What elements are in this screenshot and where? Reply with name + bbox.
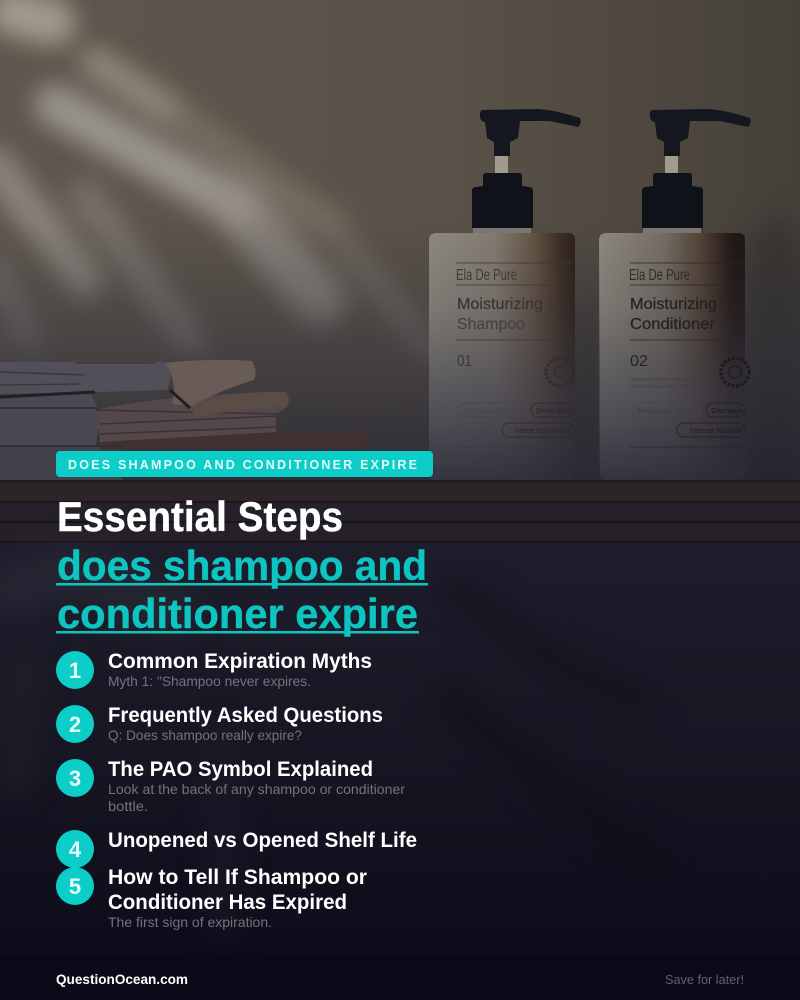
bottle label: Shampoo [457, 316, 525, 333]
step 2 text: Q: Does shampoo really expire? [108, 727, 302, 743]
lower book cover [100, 431, 367, 450]
pump stem [665, 156, 678, 173]
page block [0, 392, 100, 446]
number badge 4: 4 [69, 837, 82, 862]
upper magazine [0, 362, 171, 394]
step 5 text: The first sign of expiration. [108, 914, 272, 930]
title: conditioner expire [57, 590, 418, 637]
lower dark area: fabric and soft shadows [0, 543, 800, 956]
footer brand: QuestionOcean.com [56, 971, 188, 987]
step 4 heading: Unopened vs Opened Shelf Life [108, 829, 417, 852]
step 3 text: Look at the back of any shampoo or conditioner [108, 781, 405, 797]
step 3 [56, 758, 405, 814]
step 1 [56, 650, 372, 689]
bottle label: Acondicionador Hidratante [631, 377, 695, 383]
footer band [0, 956, 800, 1000]
number badge 2 [56, 705, 94, 743]
pump collar [642, 173, 703, 228]
bottle label: Conditioner [630, 316, 715, 333]
title: does shampoo and [57, 542, 427, 589]
wooden shelf [0, 480, 800, 543]
bottle label: Damage Repair [536, 406, 572, 415]
stack of books [0, 360, 367, 481]
number badge 1: 1 [69, 658, 81, 683]
bottle label: 01 [457, 353, 472, 370]
step 3 text: bottle. [108, 798, 148, 814]
pump stem [495, 156, 508, 173]
number badge 1 [56, 651, 94, 689]
number badge 5: 5 [69, 874, 81, 899]
bottle label: 290 ml / 9.8 fl.oz [682, 455, 710, 460]
step 5 [56, 866, 367, 930]
bottle: shampoo [429, 109, 581, 480]
number badge 3 [56, 759, 94, 797]
photo background: wall with light streaks [0, 0, 800, 510]
number badge 4 [56, 830, 94, 868]
step 3 heading: The PAO Symbol Explained [108, 758, 373, 781]
pump collar [472, 173, 533, 228]
bottle: conditioner [599, 109, 751, 480]
step 5 heading: How to Tell If Shampoo or [108, 866, 367, 889]
title [56, 493, 428, 637]
step 3 text [108, 781, 405, 814]
bottle label: Intense Nourish [690, 426, 742, 435]
bottle label: 290 ml / 9.8 fl.oz [507, 455, 535, 460]
bottle label [456, 263, 574, 460]
step 1 text: Myth 1: "Shampoo never expires. [108, 673, 311, 689]
step 2 [56, 704, 383, 743]
footer save note: Save for later! [665, 972, 744, 987]
pump head [650, 109, 751, 156]
bottle label: Damage [711, 406, 744, 415]
tag banner: DOES SHAMPOO AND CONDITIONER EXPIRE [68, 458, 417, 472]
bottle label: Moisturizes the hair [637, 406, 696, 415]
number badge 5 [56, 867, 94, 905]
number badge 3: 3 [69, 766, 81, 791]
pump head [480, 109, 581, 156]
tag banner [56, 451, 433, 477]
bottle label: Ela De Pure [456, 267, 517, 284]
step 4 [56, 829, 417, 868]
bottle label: Anti-Frizz [637, 426, 667, 435]
bottle label [629, 263, 749, 460]
bottle label: Moisturizing [630, 296, 717, 313]
bottle body [599, 233, 745, 480]
bottle label: 02 [630, 353, 648, 370]
bottle label: Moisturizing [457, 296, 543, 313]
number badge 2: 2 [69, 712, 81, 737]
title: Essential Steps [57, 493, 343, 540]
step 2 heading: Frequently Asked Questions [108, 704, 383, 727]
step 5 heading [108, 866, 367, 914]
bottle label: Anti-Frizz [463, 426, 487, 435]
bottle label: Intense Nourishment [515, 426, 571, 435]
bottle body [429, 233, 575, 480]
bottle label: Champú Hidratante [457, 377, 502, 383]
bottle label: Shampooing Hydratant [457, 384, 510, 390]
bottle label: Après-Shampooing Hydratant [631, 384, 702, 390]
step 1 heading: Common Expiration Myths [108, 650, 372, 673]
bottle label: Ela De Pure [629, 267, 690, 284]
bottle label: Moisturizes the hair [464, 406, 522, 415]
lower book spine [0, 447, 122, 481]
step 5 heading: Conditioner Has Expired [108, 891, 347, 914]
